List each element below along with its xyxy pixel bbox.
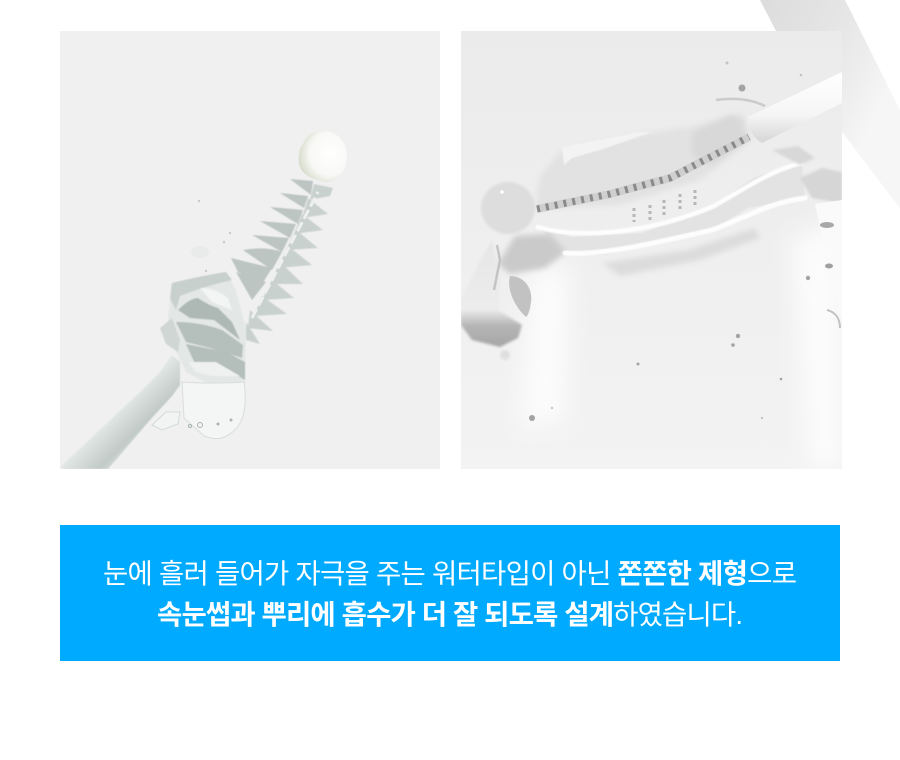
brush bristles, left side xyxy=(231,179,313,300)
gel band between the ribbons and its shadow xyxy=(498,163,805,276)
scattered gel droplets xyxy=(500,62,810,421)
gel ball at brush tip xyxy=(481,182,535,234)
pale light streaks on the gel surface xyxy=(531,233,836,448)
small gel specks xyxy=(198,200,232,272)
secondary bristles below the wire xyxy=(634,190,695,222)
white gel ball on the tip xyxy=(299,131,347,182)
background: blurred wand handle behind the right photo xyxy=(760,0,900,215)
clear gel drop below the clump xyxy=(152,382,245,439)
banner text xyxy=(103,558,797,630)
gel body around the brush xyxy=(535,113,752,210)
brush bristles, right side xyxy=(246,184,333,344)
wand handle xyxy=(60,355,180,469)
line 1: 눈에 흘러 들어가 자극을 주는 워터타입이 아닌 쫀쫀한 제형으로 xyxy=(103,558,797,589)
gel clump around the brush base xyxy=(160,272,246,385)
twisted wire brush core xyxy=(537,137,749,209)
wand handle xyxy=(716,72,842,143)
dripping gel xyxy=(461,240,531,347)
panel: brush sweeping through thick gel xyxy=(461,31,842,469)
line 2: 속눈썹과 뿌리에 흡수가 더 잘 되도록 설계하였습니다. xyxy=(157,599,743,630)
bright gel ribbon xyxy=(538,163,805,253)
right-side gel edge xyxy=(772,146,842,328)
brush core highlight xyxy=(252,192,318,318)
panel: mascara wand with gel on the tip xyxy=(60,31,440,469)
callout: blue banner xyxy=(60,525,840,661)
